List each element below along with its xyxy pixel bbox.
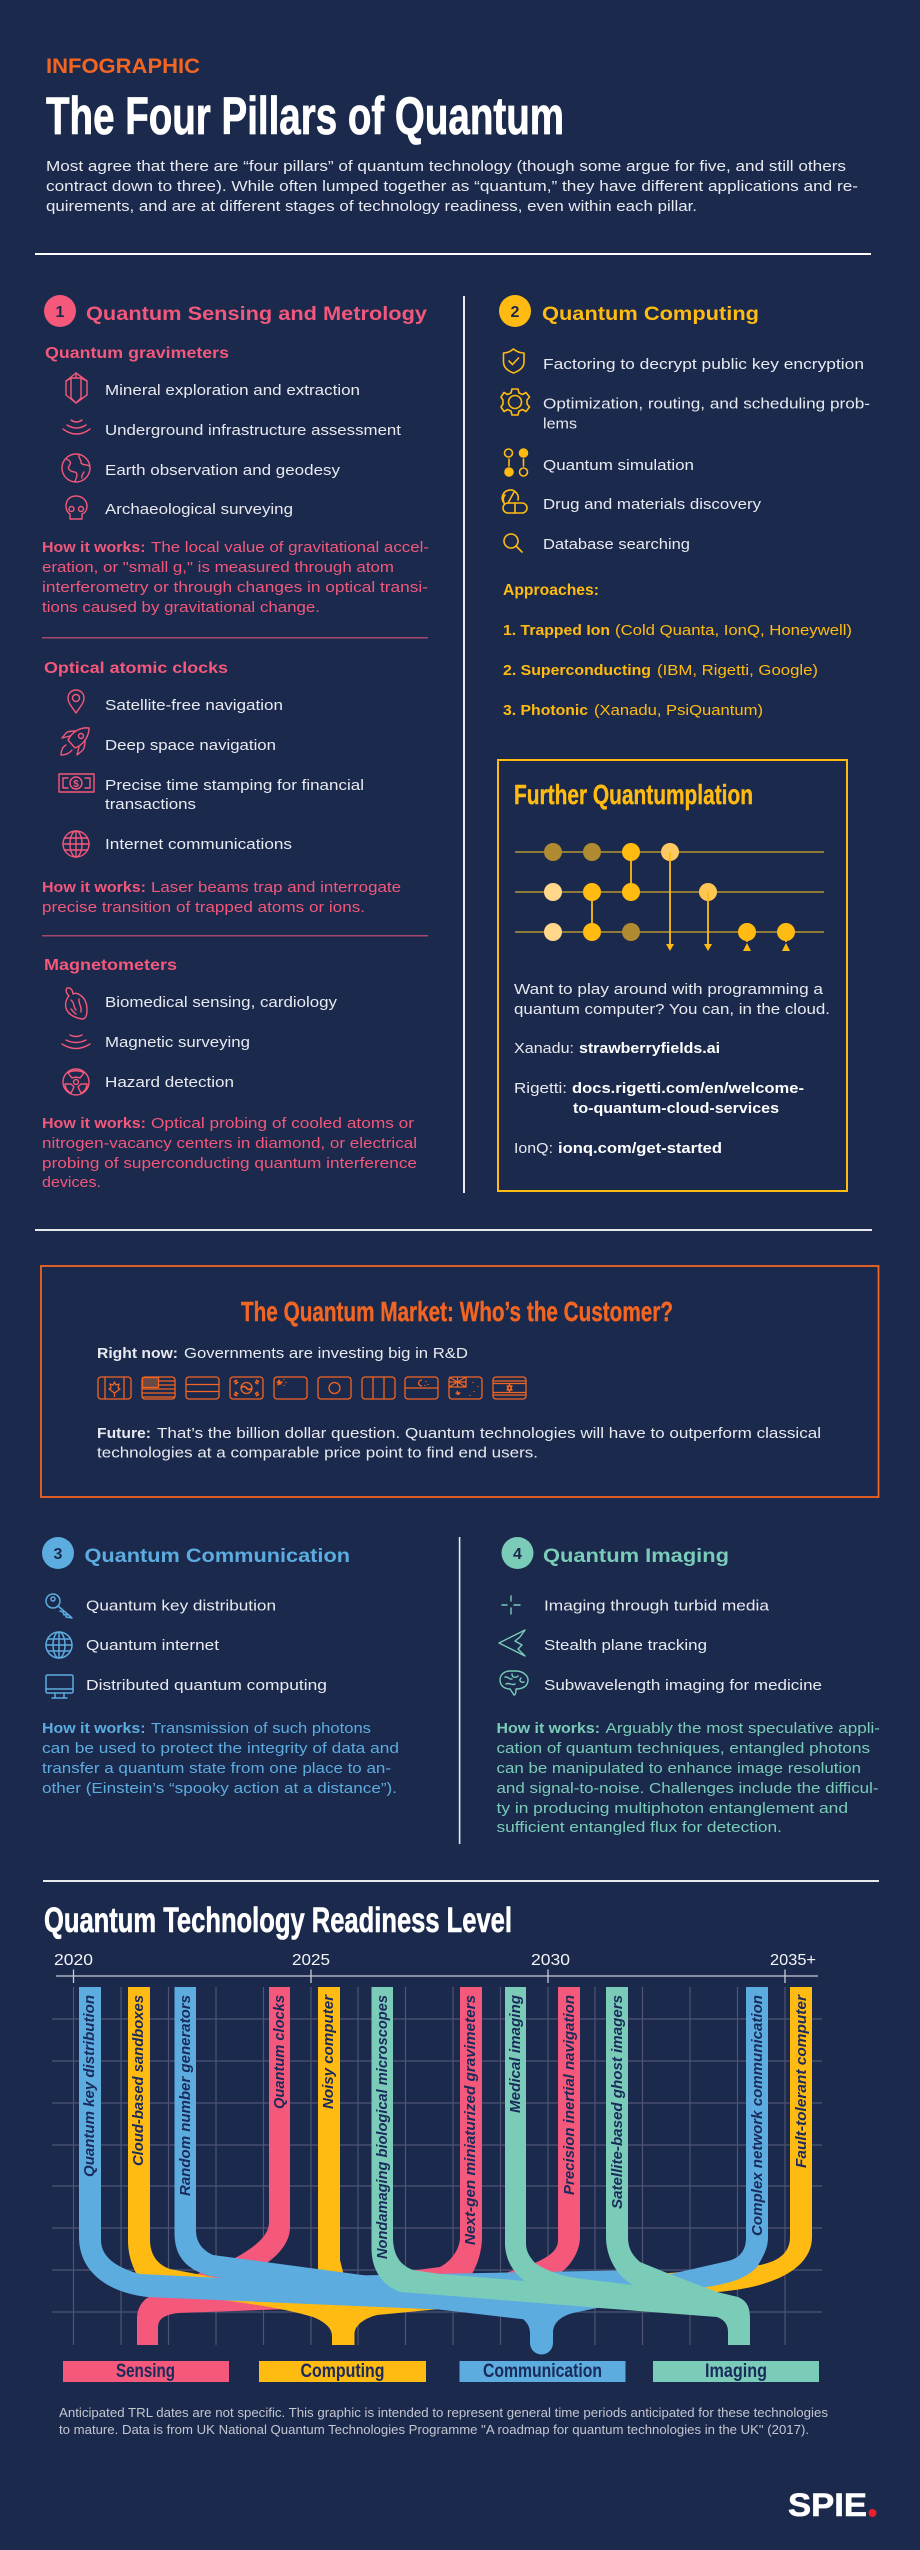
icon: qubit simulation xyxy=(504,449,528,476)
text: right now: Governments are investing big in R&D xyxy=(184,1345,468,1362)
flag: vertical tricolor xyxy=(362,1377,395,1399)
legend: Sensing xyxy=(116,2361,175,2382)
labels: technologies: Satellite-based ghost imagers xyxy=(610,1995,626,2209)
flag: south korea xyxy=(230,1377,263,1399)
list: approaches: 3. Photonic xyxy=(503,702,588,719)
flag: canada xyxy=(98,1377,131,1399)
icon: globe xyxy=(63,831,89,857)
flag: japan xyxy=(318,1377,351,1399)
how it works: gravimeters: The local value of gravitational accel- xyxy=(151,539,429,556)
list: imaging applications: Imaging through turbid media xyxy=(544,1598,770,1614)
list: imaging applications xyxy=(544,1598,822,1694)
subheading: optical atomic clocks: Optical atomic clocks xyxy=(44,660,228,677)
labels: technologies: Precision inertial navigation xyxy=(562,1995,578,2195)
icon: pills xyxy=(502,490,527,513)
heading: section 1 xyxy=(44,295,427,327)
list: communication applications xyxy=(86,1598,327,1694)
list: communication applications: Quantum internet xyxy=(86,1637,220,1654)
how it works: imaging: How it works: xyxy=(496,1720,600,1737)
list: approaches: 2. Superconducting xyxy=(503,662,651,679)
list: gravimeter applications: Archaeological surveying xyxy=(105,501,293,518)
kicker: infographic: INFOGRAPHIC xyxy=(46,55,200,78)
list: magnetometer applications: Magnetic surveying xyxy=(105,1034,250,1051)
intro paragraph xyxy=(46,158,858,215)
how it works: gravimeters: interferometry or through changes in optical transi- xyxy=(42,579,428,596)
list: magnetometer applications xyxy=(105,994,338,1091)
icon: rocket xyxy=(61,728,89,755)
text: cloud quantum links: Want to play around with programming a xyxy=(514,981,824,998)
text: future xyxy=(97,1425,821,1462)
icon: skull xyxy=(66,496,87,519)
legend: Imaging xyxy=(705,2361,767,2382)
list: computing applications: Factoring to decrypt public key encryption xyxy=(543,356,864,373)
flow: sensing technologies xyxy=(137,1987,580,2345)
how it works: imaging xyxy=(496,1720,880,1836)
text: cloud quantum links: IonQ: xyxy=(514,1140,553,1157)
legend xyxy=(63,2361,819,2382)
how it works: imaging: Arguably the most speculative appli- xyxy=(606,1720,880,1737)
how it works: magnetometers: probing of superconducting quantum interference xyxy=(42,1155,417,1172)
list: approaches: (Xanadu, PsiQuantum) xyxy=(594,702,763,719)
how it works: clocks xyxy=(42,879,401,916)
how it works: imaging: cation of quantum techniques, entangled photons xyxy=(496,1740,870,1757)
footnote: to mature. Data is from UK National Quantum Technologies Programme "A roadmap for quantum technologies in the UK" (2017). xyxy=(59,2422,809,2437)
list: magnetometer applications: Biomedical sensing, cardiology xyxy=(105,994,338,1011)
how it works: imaging: and signal-to-noise. Challenges include the difficul- xyxy=(496,1780,879,1797)
panel: further quantumplation xyxy=(498,760,847,1191)
axis: years: 2035+ xyxy=(770,1952,816,1969)
icon: hazard symbol xyxy=(63,1069,89,1095)
footnote xyxy=(59,2405,829,2437)
icon: magnifier xyxy=(504,534,522,552)
footnote: Anticipated TRL dates are not specific. This graphic is intended to represent general time periods anticipated for these technologies xyxy=(59,2405,829,2420)
icon: map pin xyxy=(68,690,84,713)
how it works: communication: How it works: xyxy=(42,1720,146,1737)
text: cloud quantum links: Rigetti: xyxy=(514,1080,567,1097)
list: computing applications xyxy=(543,356,870,553)
subheading: approaches: Approaches: xyxy=(503,582,599,599)
text: cloud quantum links: Xanadu: xyxy=(514,1040,574,1057)
list: communication applications: Distributed quantum computing xyxy=(86,1677,327,1694)
list: approaches: (Cold Quanta, IonQ, Honeywell) xyxy=(615,622,852,639)
icon: crosshair xyxy=(502,1596,520,1614)
flag: singapore xyxy=(405,1377,438,1399)
list: magnetometer applications: Hazard detection xyxy=(105,1074,234,1091)
list: approaches: 1. Trapped Ion xyxy=(503,622,610,639)
flag: australia xyxy=(449,1377,482,1399)
how it works: magnetometers xyxy=(42,1115,417,1191)
how it works: communication xyxy=(42,1720,399,1797)
how it works: gravimeters: How it works: xyxy=(42,539,146,556)
icon: earth xyxy=(62,454,90,482)
list: communication applications: Quantum key distribution xyxy=(86,1598,276,1614)
heading: section 3: Quantum Communication xyxy=(84,1546,350,1567)
text: right now: Right now: xyxy=(97,1345,178,1362)
icon: banknote: $ xyxy=(73,779,79,790)
icon: heart xyxy=(66,988,87,1019)
heading: section 4: 4 xyxy=(513,1546,522,1563)
list: imaging applications: Stealth plane tracking xyxy=(544,1637,707,1654)
intro paragraph: Most agree that there are “four pillars” of quantum technology (though some argue for five, and still others xyxy=(46,158,846,175)
subheading: magnetometers: Magnetometers xyxy=(44,957,177,974)
flag: united states xyxy=(142,1377,175,1399)
text: right now xyxy=(97,1345,468,1362)
diagram: quantum circuit xyxy=(515,843,824,951)
legend: Computing xyxy=(300,2361,384,2382)
heading: readiness level: Quantum Technology Readiness Level xyxy=(44,1901,512,1940)
labels: technologies: Cloud-based sandboxes xyxy=(131,1995,147,2166)
list: clock applications: Satellite-free navigation xyxy=(105,697,283,714)
list: computing applications: Quantum simulation xyxy=(543,457,694,474)
how it works: clocks: Laser beams trap and interrogate xyxy=(151,879,401,896)
text: cloud quantum links: strawberryfields.ai xyxy=(579,1040,720,1057)
intro paragraph: quirements, and are at different stages of technology readiness, even within each pillar. xyxy=(46,198,697,215)
list: clock applications: transactions xyxy=(105,796,196,813)
how it works: gravimeters: eration, or "small g," is measured through atom xyxy=(42,559,394,576)
how it works: clocks: How it works: xyxy=(42,879,146,896)
heading: section 4 xyxy=(502,1537,729,1569)
labels: technologies: Complex network communication xyxy=(750,1995,766,2236)
heading: section 3: 3 xyxy=(54,1546,63,1563)
heading: section 1: Quantum Sensing and Metrology xyxy=(86,304,427,325)
icon: brain xyxy=(500,1671,528,1695)
icon: crystal xyxy=(66,373,87,403)
how it works: communication: transfer a quantum state from one place to an- xyxy=(42,1760,391,1777)
labels: technologies: Quantum key distribution xyxy=(82,1995,98,2177)
how it works: gravimeters xyxy=(42,539,429,616)
text: cloud quantum links: quantum computer? You can, in the cloud. xyxy=(514,1001,830,1018)
list: clock applications: Deep space navigation xyxy=(105,737,276,754)
list: computing applications: Drug and materials discovery xyxy=(543,496,762,513)
icon: banknote xyxy=(59,774,94,792)
intro paragraph: contract down to three). While often lumped together as “quantum,” they have different applications and re- xyxy=(46,178,858,195)
labels: technologies: Random number generators xyxy=(178,1995,194,2196)
how it works: communication: other (Einstein’s “spooky action at a distance”). xyxy=(42,1780,397,1797)
heading: the quantum market: The Quantum Market: Who’s the Customer? xyxy=(241,1296,673,1327)
subheading: quantum gravimeters: Quantum gravimeters xyxy=(45,345,229,362)
list: imaging applications: Subwavelength imaging for medicine xyxy=(544,1677,822,1694)
list: computing applications: Optimization, routing, and scheduling prob- xyxy=(543,396,870,412)
title: The Four Pillars of Quantum xyxy=(46,87,564,146)
axis: years: 2030 xyxy=(531,1952,570,1969)
panel: quantum communication xyxy=(42,1537,399,1797)
list: approaches: (IBM, Rigetti, Google) xyxy=(657,662,818,679)
list: gravimeter applications: Mineral exploration and extraction xyxy=(105,382,360,399)
list: clock applications: Internet communications xyxy=(105,836,292,853)
how it works: magnetometers: devices. xyxy=(42,1174,101,1191)
flag: horizontal tricolor xyxy=(186,1377,219,1399)
icon: magnetic waves xyxy=(62,1035,90,1048)
text: future: technologies at a comparable price point to find end users. xyxy=(97,1444,538,1462)
logo: spie: SPIE xyxy=(788,2487,867,2523)
text: cloud quantum links: docs.rigetti.com/en/welcome- xyxy=(572,1080,804,1097)
text: cloud quantum links xyxy=(514,981,830,1157)
axis: years: 2020 xyxy=(54,1952,93,1969)
how it works: communication: can be used to protect the integrity of data and xyxy=(42,1740,399,1757)
chart: technology readiness timeline xyxy=(52,1952,822,2354)
how it works: communication: Transmission of such photons xyxy=(151,1720,371,1737)
labels: technologies: Quantum clocks xyxy=(272,1995,288,2109)
heading: section 3 xyxy=(42,1537,350,1569)
axis: years xyxy=(54,1952,818,1983)
heading: section 2 xyxy=(499,295,759,327)
how it works: magnetometers: nitrogen-vacancy centers in diamond, or electrical xyxy=(42,1135,417,1152)
icon: shield xyxy=(504,349,524,373)
text: cloud quantum links: ionq.com/get-started xyxy=(558,1140,722,1157)
labels: technologies: Next-gen miniaturized gravimeters xyxy=(463,1995,479,2245)
labels: technologies: Fault-tolerant computer xyxy=(794,1994,810,2168)
text: future: That’s the billion dollar question. Quantum technologies will have to outperform classical xyxy=(157,1425,821,1442)
text: future: Future: xyxy=(97,1425,151,1442)
list: gravimeter applications xyxy=(105,382,402,518)
labels: technologies: Noisy computer xyxy=(321,1994,337,2109)
icon: key xyxy=(46,1594,72,1618)
heading: section 4: Quantum Imaging xyxy=(543,1546,729,1567)
panel: the quantum market xyxy=(41,1266,878,1497)
how it works: imaging: can be manipulated to enhance image resolution xyxy=(496,1760,861,1777)
icons: country flags xyxy=(98,1377,526,1399)
text: cloud quantum links: to-quantum-cloud-services xyxy=(573,1100,779,1117)
heading: section 2: Quantum Computing xyxy=(542,304,759,325)
flag: china xyxy=(274,1377,307,1399)
icon: seismic waves xyxy=(63,420,90,434)
flow: communication technologies xyxy=(79,1987,768,2354)
flow: imaging technologies xyxy=(372,1987,750,2345)
icon: gear xyxy=(501,389,530,415)
panel: quantum imaging xyxy=(496,1537,880,1836)
list: computing applications: Database searching xyxy=(543,536,690,553)
how it works: magnetometers: How it works: xyxy=(42,1115,146,1132)
list: gravimeter applications: Underground infrastructure assessment xyxy=(105,422,402,439)
list: gravimeter applications: Earth observation and geodesy xyxy=(105,462,341,479)
panel: quantum sensing and metrology xyxy=(42,295,429,1191)
flow: computing technologies xyxy=(128,1987,812,2345)
how it works: magnetometers: Optical probing of cooled atoms or xyxy=(151,1115,414,1132)
how it works: clocks: precise transition of trapped atoms or ions. xyxy=(42,899,365,916)
axis: years: 2025 xyxy=(292,1952,330,1969)
heading: section 2: 2 xyxy=(511,304,520,321)
list: computing applications: lems xyxy=(543,416,577,432)
heading: section 1: 1 xyxy=(56,304,65,321)
how it works: imaging: ty in producing multiphoton entanglement and xyxy=(496,1800,848,1817)
how it works: gravimeters: tions caused by gravitational change. xyxy=(42,599,320,616)
list: clock applications xyxy=(105,697,364,853)
heading: further quantumplation: Further Quantumplation xyxy=(514,779,753,810)
labels: technologies xyxy=(82,1994,810,2259)
how it works: imaging: sufficient entangled flux for detection. xyxy=(496,1819,782,1836)
panel: quantum computing xyxy=(498,295,870,1191)
legend: Communication xyxy=(483,2361,602,2382)
labels: technologies: Medical imaging xyxy=(508,1995,524,2113)
list: clock applications: Precise time stamping for financial xyxy=(105,777,364,794)
labels: technologies: Nondamaging biological microscopes xyxy=(375,1995,391,2259)
icon: stealth plane xyxy=(499,1630,525,1656)
icon: internet globe xyxy=(46,1632,72,1658)
icon: monitor xyxy=(46,1675,73,1698)
list: approaches xyxy=(503,622,852,719)
flag: israel xyxy=(493,1377,526,1399)
